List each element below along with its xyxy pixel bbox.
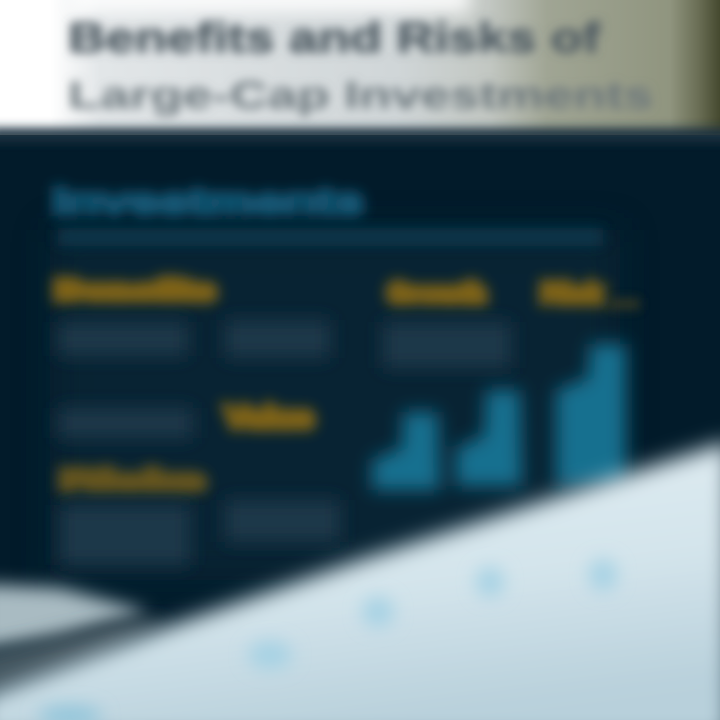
small gold mark: [610, 298, 640, 310]
header background: [0, 0, 720, 135]
paper chart dots: [38, 559, 617, 720]
section labels in gold: Risk: [540, 277, 604, 310]
foreground paper: [0, 441, 720, 720]
panel: dark navy board: [0, 128, 720, 638]
title: Large-Cap Investments: [68, 75, 653, 117]
bar chart: [372, 344, 626, 490]
title: [68, 14, 653, 117]
title: Benefits and Risks of: [68, 14, 601, 61]
section labels in gold: [54, 274, 604, 497]
subtitle line: [58, 228, 603, 246]
section labels in gold: Risks: [60, 464, 205, 497]
body text blocks: [58, 320, 511, 565]
section labels in gold: Value: [224, 399, 314, 435]
panel heading: Investments: [52, 181, 364, 223]
section labels in gold: Benefits: [54, 274, 216, 307]
left sheet of paper: [0, 584, 170, 700]
section labels in gold: Growth: [387, 277, 487, 310]
